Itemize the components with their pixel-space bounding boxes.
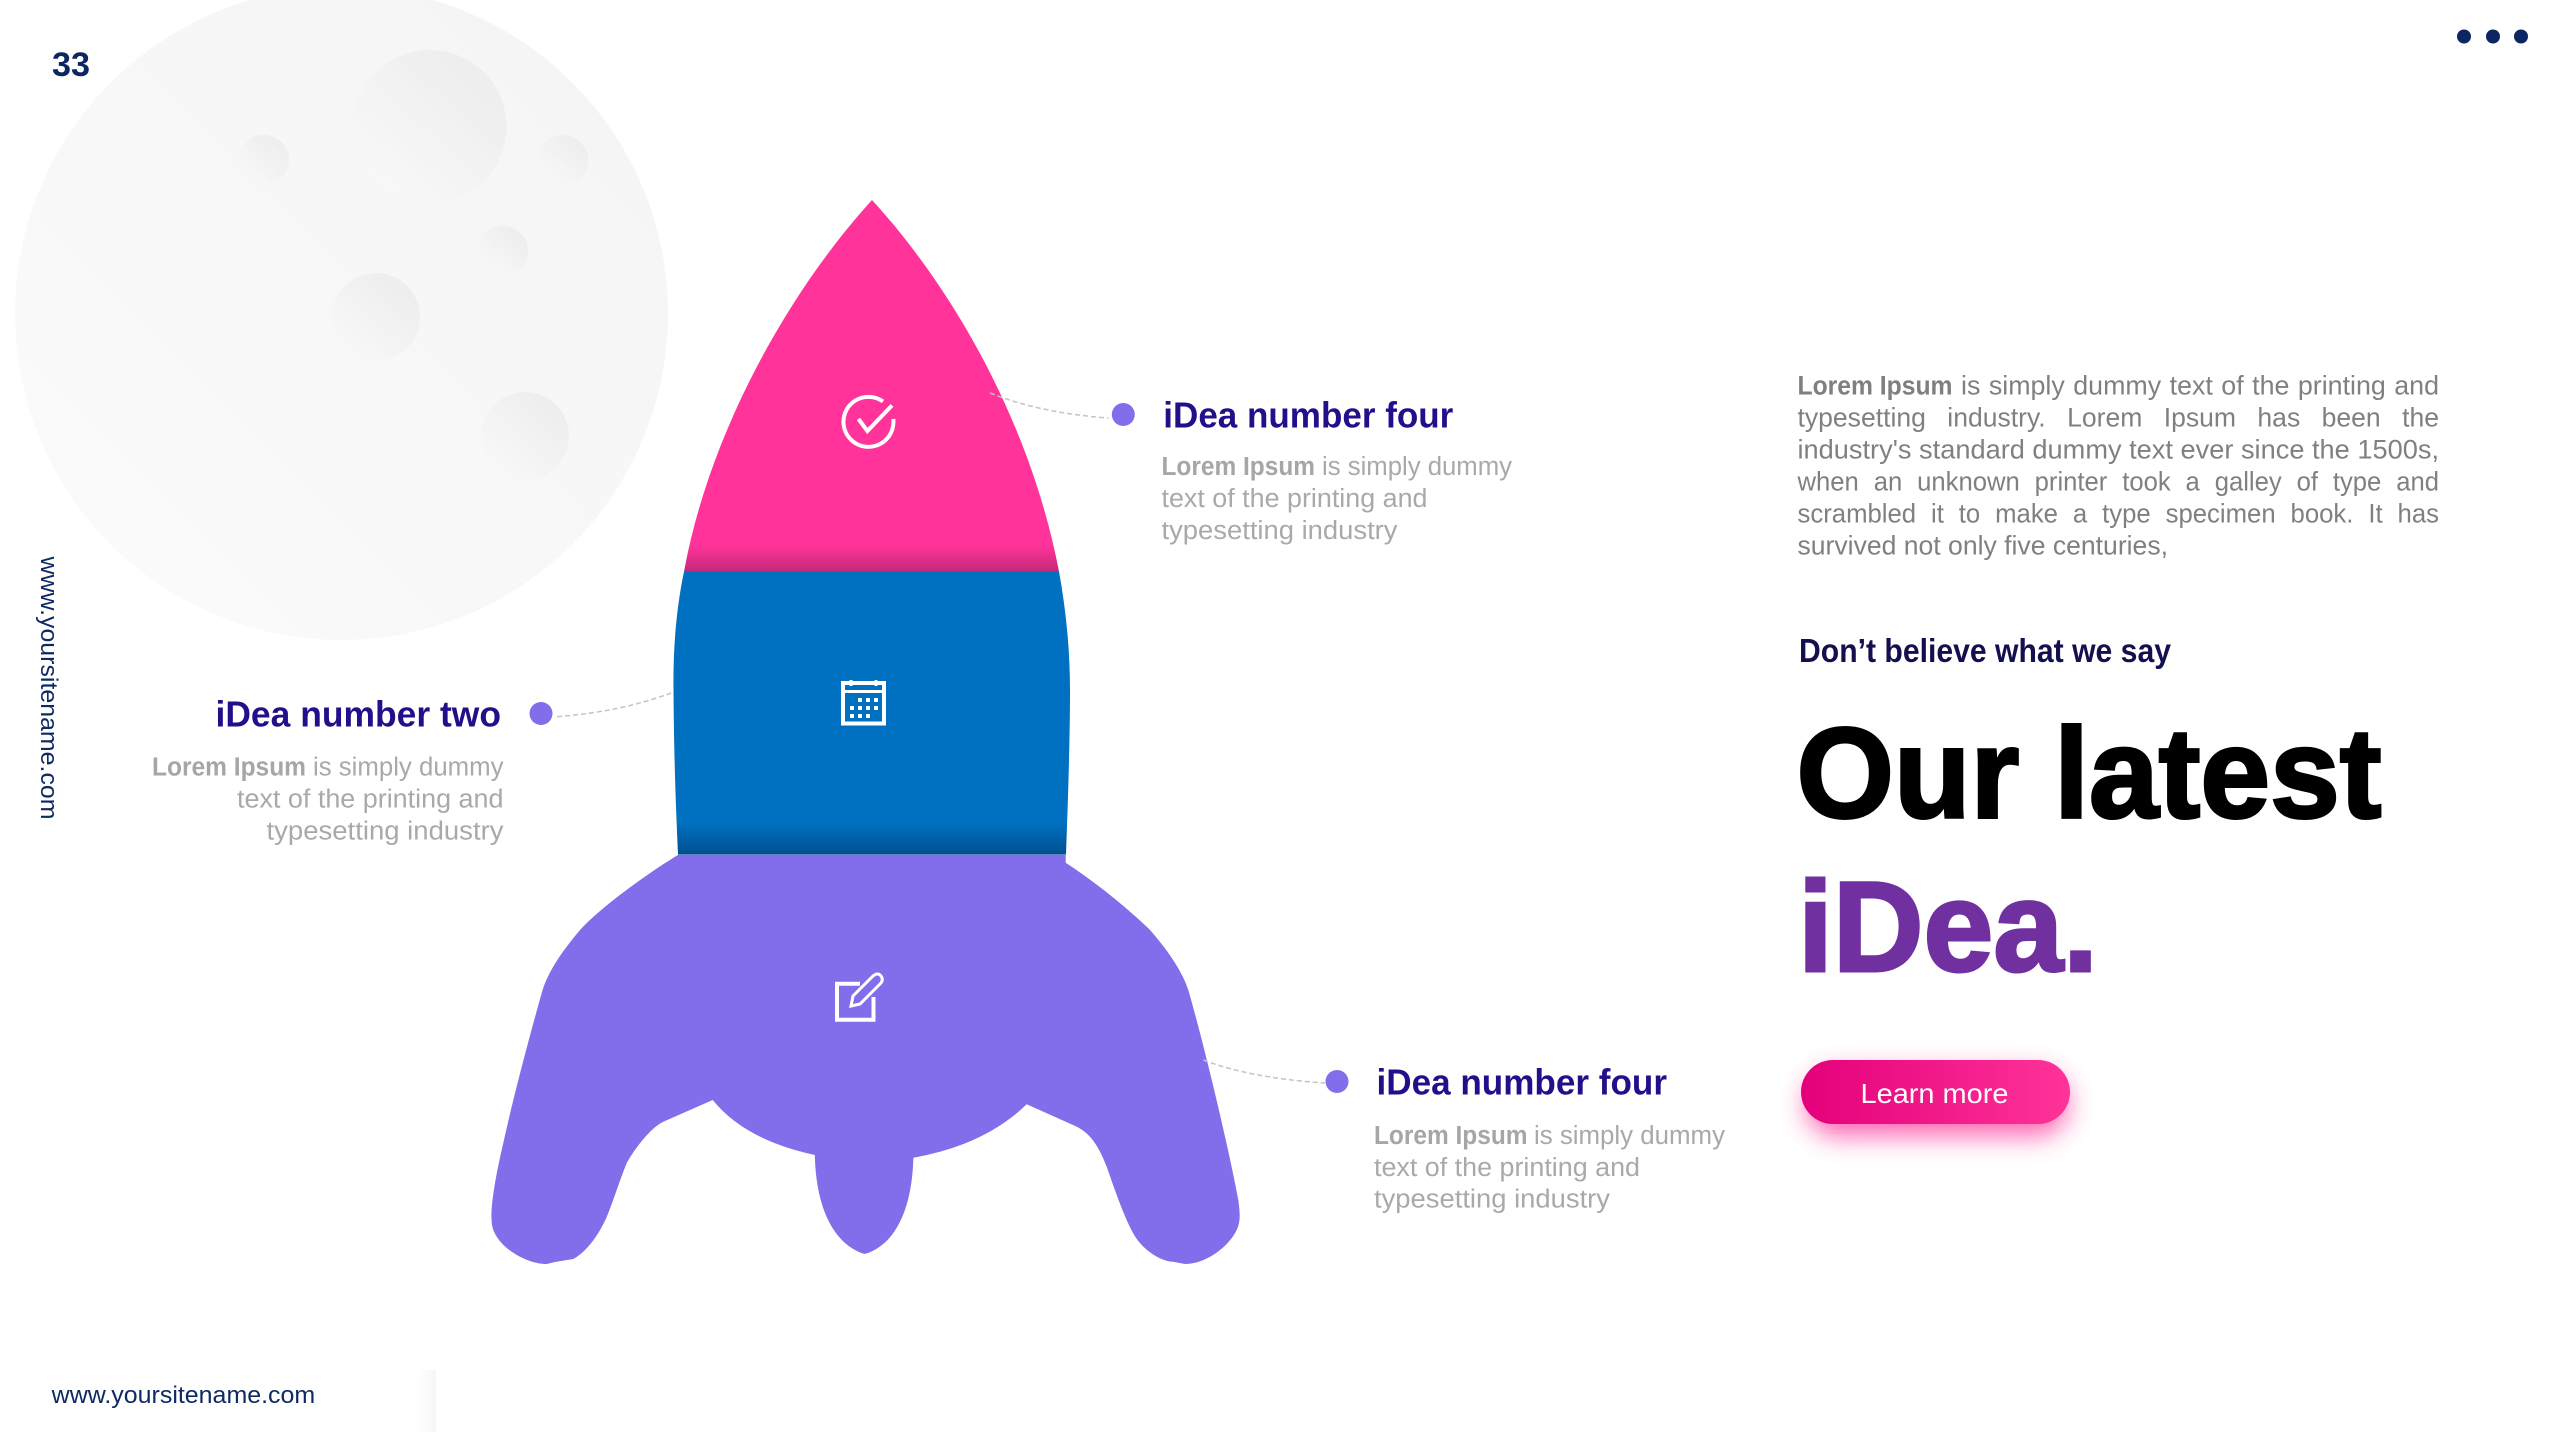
callout heading: iDea number four	[1376, 1062, 1667, 1102]
callout heading: iDea number two	[216, 694, 501, 735]
callout body: typesetting industry	[1162, 517, 1398, 545]
connector: idea four bottom	[1203, 1060, 1325, 1083]
small crater left	[239, 135, 289, 185]
moon illustration	[15, 0, 668, 640]
icon: check circle	[843, 397, 893, 447]
rocket body: blue section	[673, 572, 1070, 854]
button: learn more	[1801, 1060, 2070, 1136]
callout: idea number two	[152, 694, 552, 846]
callout body: typesetting industry	[1374, 1186, 1610, 1214]
main title	[1796, 703, 2382, 999]
marker dot	[1112, 403, 1135, 426]
page number: 33	[52, 46, 90, 84]
rocket nose: pink section	[684, 200, 1059, 572]
intro paragraph: scrambled it to make a type specimen book. It has	[1798, 498, 2439, 528]
intro paragraph	[1797, 370, 2439, 560]
intro paragraph: when an unknown printer took a galley of type and	[1797, 466, 2439, 496]
intro paragraph: survived not only five centuries,	[1798, 530, 2168, 560]
moon disc	[15, 0, 668, 640]
callout body: text of the printing and	[1374, 1154, 1640, 1182]
callout heading: iDea number four	[1163, 395, 1453, 436]
callout body: is simply dummy	[1534, 1122, 1725, 1150]
marker dot	[530, 702, 552, 725]
button pill	[1801, 1060, 2070, 1124]
button label: Learn more	[1860, 1078, 2008, 1109]
callout body: Lorem Ipsum	[1162, 453, 1315, 481]
intro paragraph: typesetting industry. Lorem Ipsum has been the	[1798, 402, 2439, 432]
button glow	[1806, 1072, 2068, 1136]
marker dot	[1326, 1070, 1348, 1093]
callout body	[1162, 453, 1512, 545]
callout body	[152, 753, 504, 846]
callout body: typesetting industry	[266, 818, 504, 846]
small crater centre	[478, 226, 528, 276]
callout body: Lorem Ipsum	[152, 753, 306, 781]
callout body: text of the printing and	[237, 785, 504, 813]
icon: calendar	[843, 680, 884, 724]
rocket base: purple section with fins	[491, 855, 1240, 1264]
large crater	[354, 50, 506, 203]
callout body	[1374, 1122, 1725, 1214]
icon: edit pencil	[837, 974, 882, 1020]
subheading: Don’t believe what we say	[1799, 632, 2172, 669]
connector: idea four top	[990, 393, 1108, 418]
connector: idea two	[557, 693, 671, 717]
medium crater centre	[332, 273, 420, 361]
vertical site url: www.yoursitename.com	[35, 555, 62, 819]
callout body: is simply dummy	[1322, 453, 1512, 481]
callout body: Lorem Ipsum	[1374, 1122, 1528, 1150]
intro paragraph: Lorem Ipsum	[1798, 370, 1952, 400]
callout: idea number four (bottom)	[1326, 1062, 1725, 1214]
footer site url: www.yoursitename.com	[51, 1382, 315, 1409]
rocket illustration	[491, 200, 1240, 1264]
title line two: iDea.	[1798, 856, 2098, 999]
medium crater lower	[481, 392, 569, 480]
callout: idea number four (top)	[1112, 395, 1512, 545]
callout body: text of the printing and	[1162, 485, 1428, 513]
title line one: Our latest	[1796, 703, 2382, 846]
menu dots icon	[2457, 30, 2528, 44]
intro paragraph: is simply dummy text of the printing and	[1961, 370, 2439, 400]
intro paragraph: industry's standard dummy text ever since the 1500s,	[1798, 434, 2439, 464]
small crater right	[538, 135, 588, 185]
callout body: is simply dummy	[313, 753, 504, 781]
